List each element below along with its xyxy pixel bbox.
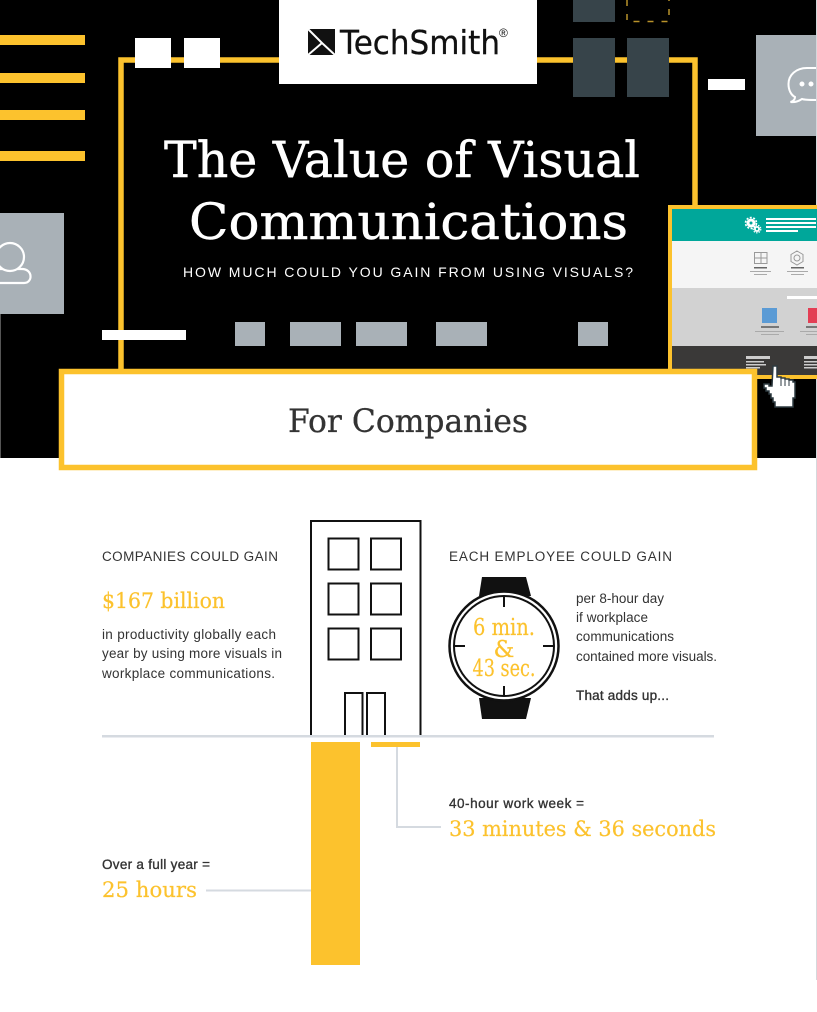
label: companies could gain: COMPANIES COULD GAIN	[102, 549, 278, 564]
grey placeholder blocks	[235, 322, 608, 346]
decorative yellow stripes	[0, 35, 85, 161]
that adds up: That adds up...	[576, 688, 669, 703]
stat: $167 billion: $167 billion	[102, 589, 225, 614]
employee description: if workplace	[576, 610, 648, 625]
callout: work week: 40-hour work week =	[449, 796, 584, 811]
callout: work week: 33 minutes & 36 seconds	[449, 817, 716, 842]
icon: gears	[746, 218, 761, 233]
employee description: per 8-hour day	[576, 591, 664, 606]
title	[164, 131, 640, 251]
bar: full year	[311, 742, 360, 965]
mock feature captions	[750, 267, 808, 275]
employee description	[576, 591, 717, 703]
description: year by using more visuals in	[102, 646, 282, 661]
mock coloured tiles	[762, 308, 777, 323]
section banner: For Companies	[62, 372, 754, 468]
description	[101, 627, 282, 681]
icon: office building	[311, 521, 420, 736]
title: Communications	[189, 193, 628, 251]
left text block	[101, 549, 282, 681]
callout: full year: Over a full year =	[102, 857, 210, 872]
subtitle: HOW MUCH COULD YOU GAIN FROM USING VISUALS?	[183, 264, 633, 280]
yellow frame	[121, 60, 695, 372]
connector: full year	[206, 890, 311, 892]
mock text lines on teal	[766, 218, 816, 232]
dark slate blocks	[573, 0, 669, 97]
ground line	[102, 735, 714, 738]
website mockup panel	[670, 207, 817, 377]
icon: feature grid	[754, 251, 803, 265]
employee description: communications	[576, 629, 674, 644]
registered mark: ®	[499, 26, 508, 40]
label: each employee could gain: EACH EMPLOYEE COULD GAIN	[449, 549, 672, 564]
mock tile captions	[755, 326, 817, 335]
bar: work week	[371, 742, 420, 747]
icon: speech bubble	[788, 68, 816, 102]
side card: chat	[756, 35, 816, 136]
logo	[279, 0, 537, 84]
dashed placeholder block	[627, 0, 669, 22]
logo wordmark: TechSmith	[339, 23, 500, 62]
watch text: 43 sec.	[472, 654, 536, 682]
title: The Value of Visual	[164, 131, 640, 189]
watch text: &	[494, 635, 514, 663]
connector: work week	[397, 747, 441, 827]
employee description: contained more visuals.	[576, 649, 717, 664]
callout: full year: 25 hours	[102, 878, 197, 903]
callout: work week	[449, 796, 716, 842]
side card: person	[0, 213, 64, 314]
white header blocks	[102, 38, 745, 340]
watch text: 6 min.	[473, 613, 535, 641]
description: in productivity globally each	[102, 627, 276, 642]
icon: person	[0, 243, 31, 283]
section heading: For Companies	[288, 402, 528, 440]
watch text	[472, 613, 536, 682]
icon: watch	[450, 577, 558, 719]
callout: full year	[102, 857, 210, 903]
header background	[0, 0, 816, 458]
mock footer text	[746, 356, 817, 368]
description: workplace communications.	[101, 666, 275, 681]
icon: TechSmith mark	[308, 29, 335, 55]
icon: pointer hand cursor	[764, 366, 795, 407]
